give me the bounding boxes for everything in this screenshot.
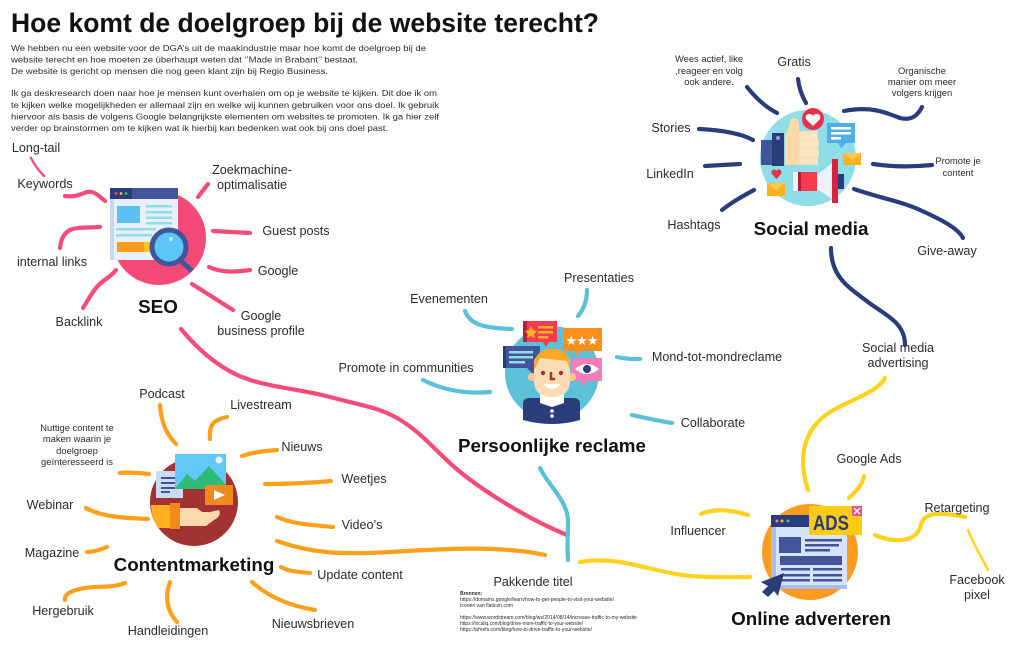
labels: SEO: Zoekmachine- — [212, 163, 292, 177]
Social media spokes — [699, 79, 963, 238]
labels: Contentmarketing: Webinar — [27, 498, 73, 512]
heading: Social media: Social media — [754, 218, 869, 239]
labels: Contentmarketing: Video’s — [342, 518, 382, 532]
labels: Contentmarketing — [25, 387, 403, 638]
labels: Social media: Organische — [898, 65, 946, 76]
SEO spokes — [31, 158, 250, 310]
labels: Social media — [646, 53, 981, 258]
sources: https://ahrefs.com/blog/how-to-drive-traffic-to-your-website/ — [460, 627, 593, 633]
labels: Contentmarketing: maken waarin je — [43, 433, 111, 444]
labels: Online adverteren: pixel — [964, 588, 990, 602]
labels: SEO: Long-tail — [12, 141, 60, 155]
labels: Contentmarketing: Magazine — [25, 546, 79, 560]
labels: SEO: Backlink — [56, 315, 103, 329]
intro text: Ik ga deskresearch doen naar hoe je mensen kunt overhalen om op je website te kijken. Dit doe ik om — [11, 88, 437, 98]
panel: SEO — [12, 141, 330, 338]
labels: Social media: Give-away — [917, 244, 977, 258]
labels: Online adverteren: Retargeting — [924, 501, 990, 515]
sources: https://localiq.com/blog/drive-more-traffic-to-your-website/ — [460, 621, 584, 627]
connector: SEO to Pakkende titel — [181, 329, 567, 535]
labels: Social media: volgers krijgen — [892, 87, 952, 98]
icon: ads browser with cursor — [761, 504, 862, 600]
panel: Contentmarketing — [25, 387, 545, 638]
icon: SEO browser and magnifier — [110, 188, 206, 285]
panel: Online adverteren — [580, 341, 1005, 629]
title: Hoe komt de doelgroep bij de website terecht? — [11, 8, 599, 38]
sources: Bronnen: — [460, 591, 483, 597]
icon: person with speech bubbles — [503, 321, 602, 424]
labels: SEO: business profile — [217, 324, 305, 338]
intro text: website terecht en hoe moeten ze überhaupt weten dat ‘’Made in Brabant’’ bestaat. — [10, 54, 358, 64]
labels: Social media: content — [943, 167, 974, 178]
labels: Contentmarketing: Update content — [317, 568, 403, 582]
connector: Social media to Social media advertising — [831, 248, 905, 345]
labels: Social media: Wees actief, like — [675, 53, 743, 64]
intro text: We hebben nu een website voor de DGA’s uit de maakindustrie maar hoe komt de doelgroep bij de — [11, 43, 426, 53]
labels: Online adverteren: Facebook — [949, 573, 1005, 587]
labels: Contentmarketing: Nuttige content te — [40, 422, 114, 433]
labels: Social media: ook andere. — [684, 76, 734, 87]
panel: Social media — [646, 53, 981, 258]
icon: ads browser with cursor: ADS — [813, 512, 849, 535]
labels: Contentmarketing: Nieuws — [281, 440, 323, 454]
labels: SEO: internal links — [17, 255, 87, 269]
labels: Online adverteren: advertising — [868, 356, 928, 370]
Contentmarketing spokes — [65, 405, 545, 622]
heading: Contentmarketing: Contentmarketing — [114, 554, 274, 575]
icon: social thumbs up and megaphone — [760, 108, 861, 206]
heading: Online adverteren: Online adverteren — [731, 608, 891, 629]
labels: Social media: Hashtags — [667, 218, 721, 232]
Online adverteren spokes — [580, 378, 988, 577]
labels: Contentmarketing: Hergebruik — [32, 604, 94, 618]
heading: Persoonlijke reclame: Persoonlijke reclame — [458, 435, 646, 456]
labels: Online adverteren: Google Ads — [836, 452, 902, 466]
labels: Persoonlijke reclame: Promote in communities — [338, 361, 474, 375]
labels: Social media: manier om meer — [888, 76, 956, 87]
labels: Online adverteren — [670, 341, 1005, 602]
labels: Contentmarketing: doelgroep — [56, 445, 98, 456]
labels: Persoonlijke reclame: Collaborate — [681, 416, 745, 430]
labels: SEO — [12, 141, 330, 338]
intro text: te kijken welke mogelijkheden er allemaal zijn en welke wij kunnen gebruiken voor ons doel. Ik gebruik — [11, 100, 440, 110]
labels: SEO: Keywords — [17, 177, 73, 191]
label: Pakkende titel: Pakkende titel — [493, 575, 573, 589]
sources: Iconen van flaticon.com — [460, 603, 513, 609]
labels: Contentmarketing: Handleidingen — [128, 624, 208, 638]
Persoonlijke reclame spokes — [423, 290, 672, 560]
labels: Persoonlijke reclame: Mond-tot-mondreclame — [652, 350, 782, 364]
heading: SEO: SEO — [138, 296, 178, 317]
labels: Contentmarketing: Podcast — [139, 387, 185, 401]
labels: Persoonlijke reclame — [338, 271, 782, 430]
labels: Social media: Stories — [651, 121, 691, 135]
labels: Social media: Promote je — [935, 155, 981, 166]
labels: SEO: Guest posts — [262, 224, 330, 238]
icon: content hand with picture and video — [150, 454, 238, 546]
intro text: De website is gericht op mensen die nog geen klant zijn bij Regio Business. — [11, 66, 328, 76]
panel: Persoonlijke reclame — [338, 271, 782, 560]
labels: Online adverteren: Social media — [862, 341, 934, 355]
intro text: hiervoor als basis de volgens Google belangrijkste elementen om websites te promoten. Ik ga hier zelf — [11, 112, 440, 122]
sources — [460, 591, 637, 633]
labels: Social media: LinkedIn — [646, 167, 694, 181]
labels: Contentmarketing: geïnteresseerd is — [41, 456, 113, 467]
icon: person with speech bubbles: ★★★ — [566, 333, 598, 348]
labels: Contentmarketing: Livestream — [230, 398, 292, 412]
intro text: verder op brainstormen om te kijken wat ik hierbij kan bedenken wat ook bij ons doel past. — [11, 123, 388, 133]
labels: SEO: optimalisatie — [217, 178, 287, 192]
labels: Online adverteren: Influencer — [670, 524, 726, 538]
sources: https://domains.google/learn/how-to-get-people-to-visit-your-website/ — [460, 597, 615, 603]
labels: Persoonlijke reclame: Evenementen — [410, 292, 488, 306]
labels: Social media: Gratis — [777, 55, 811, 69]
labels: Contentmarketing: Weetjes — [341, 472, 387, 486]
intro text — [10, 43, 440, 133]
labels: Contentmarketing: Nieuwsbrieven — [272, 617, 354, 631]
labels: Social media: ,reageer en volg — [675, 65, 743, 76]
labels: SEO: Google — [258, 264, 298, 278]
labels: Persoonlijke reclame: Presentaties — [564, 271, 634, 285]
sources: https://www.wordstream.com/blog/ws/2014/08/14/increase-traffic-to-my-website — [460, 615, 637, 621]
labels: SEO: Google — [241, 309, 281, 323]
